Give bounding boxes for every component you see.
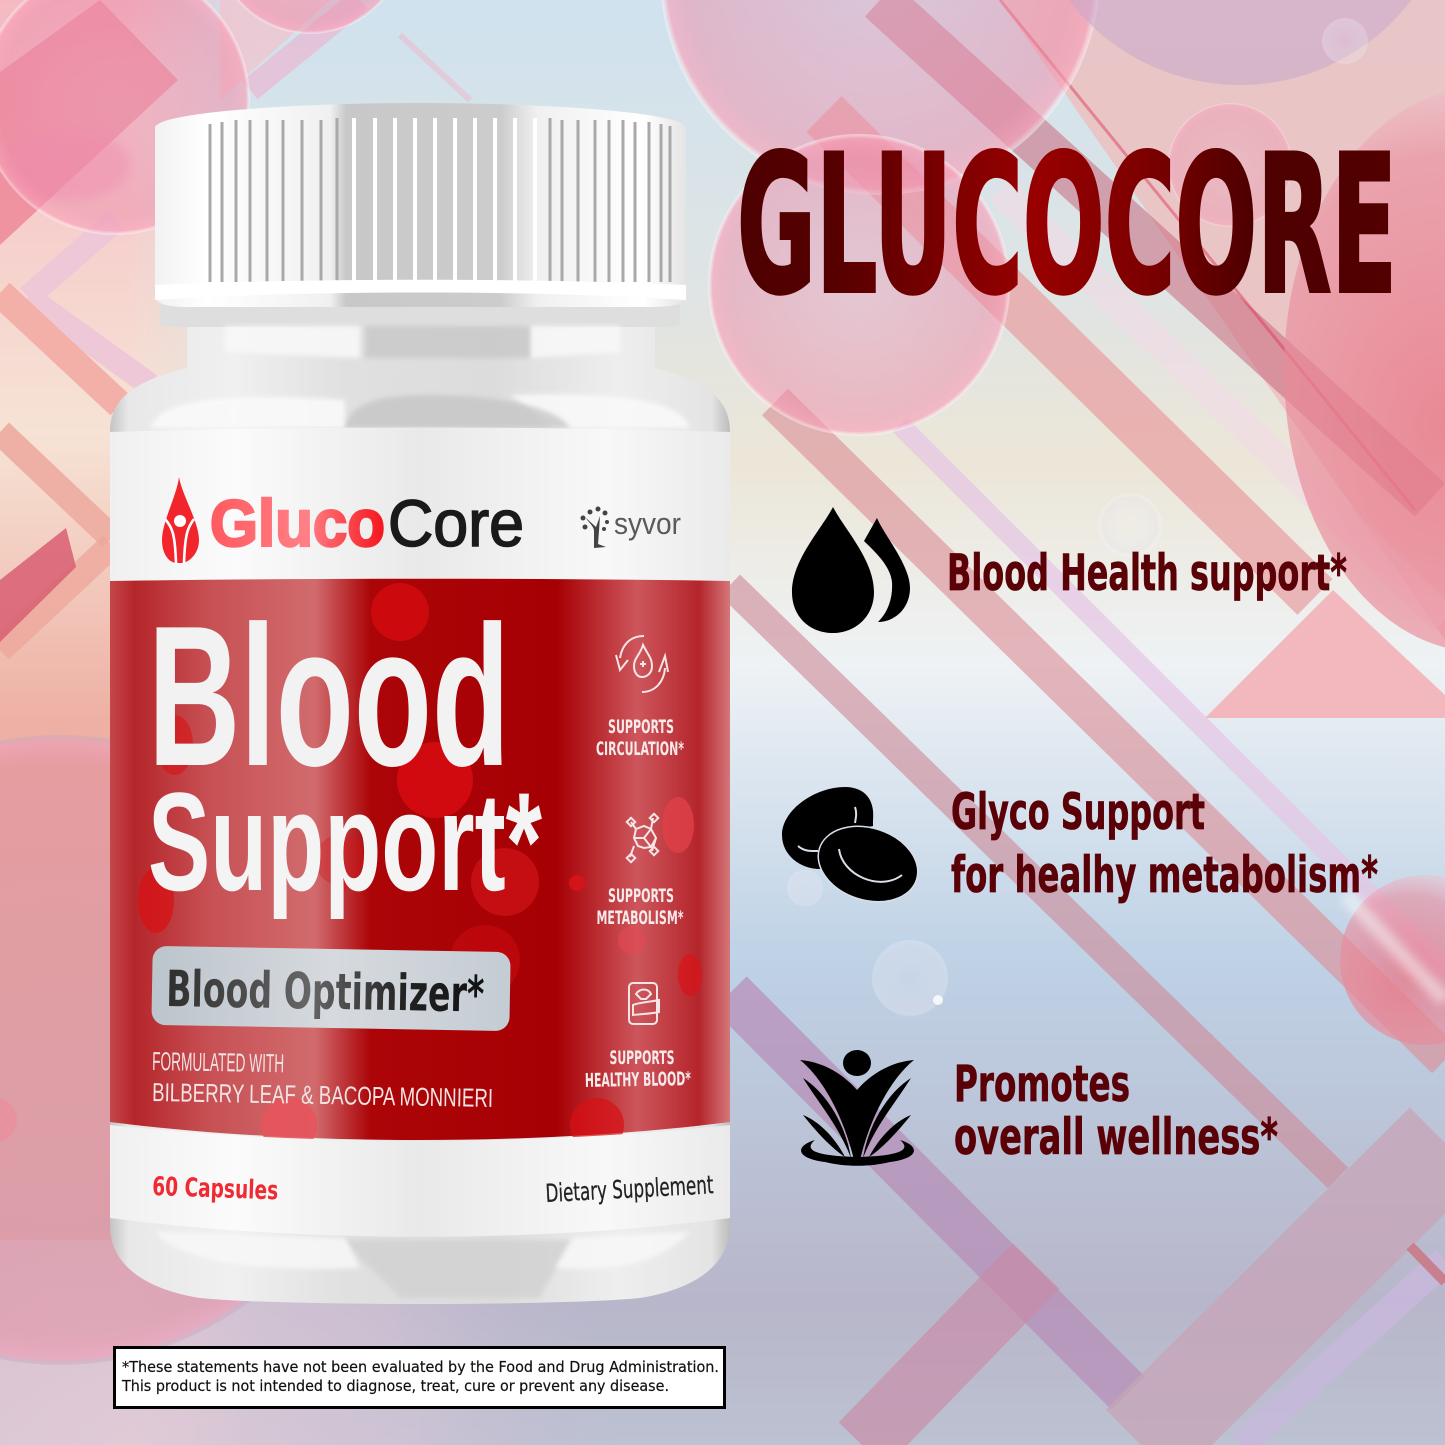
brand logo: GlucoCore: Core (388, 486, 524, 560)
headline: Support: Support* (148, 763, 542, 920)
benefit: metabolism: METABOLISM* (596, 907, 684, 929)
benefit: circulation (596, 636, 684, 760)
icon: wellness figure (800, 1050, 914, 1166)
badge: Blood Optimizer (151, 946, 511, 1031)
bottle body shape (110, 322, 730, 1304)
top white label (110, 428, 730, 581)
icon: circulation (616, 636, 668, 692)
benefit: healthy blood: HEALTHY BLOOD* (585, 1068, 691, 1092)
benefit row: wellness (800, 1050, 1278, 1166)
brand logo: GlucoCore (162, 477, 524, 563)
benefit: healthy blood: SUPPORTS (610, 1047, 674, 1069)
text: glyco support (951, 783, 1378, 904)
text: promotes overall wellness: overall wellness* (954, 1108, 1278, 1166)
headline: Blood: Blood (148, 585, 510, 808)
syvor brand (580, 506, 681, 548)
bottom white label (110, 1125, 730, 1237)
icon: blood cells (782, 787, 928, 914)
icon: molecule (627, 814, 658, 862)
icon: blood drops (792, 507, 910, 633)
benefit: metabolism: SUPPORTS (608, 885, 674, 907)
formula text: BILBERRY LEAF & BACOPA MONNIERI (152, 1077, 493, 1113)
syvor tree icon (580, 506, 609, 548)
benefit: circulation: SUPPORTS (608, 716, 674, 738)
text: promotes overall wellness: Promotes (954, 1055, 1130, 1113)
syvor brand: syvor (614, 506, 681, 541)
disclaimer box: *These statements have not been evaluated by the Food and Drug Administration. (122, 1358, 719, 1376)
capsule count: 60 Capsules (152, 1172, 279, 1206)
disclaimer box: This product is not intended to diagnose, treat, cure or prevent any disease. (121, 1377, 669, 1395)
benefit row: blood health (792, 507, 1347, 633)
disclaimer box (114, 1348, 724, 1408)
logo drop icon (162, 477, 199, 563)
red label (110, 579, 730, 1153)
benefit row: glyco support (782, 783, 1378, 914)
cap (155, 103, 686, 307)
text: promotes overall wellness (954, 1055, 1278, 1166)
benefit: metabolism (596, 814, 684, 929)
product bottle (110, 103, 730, 1304)
text: glyco support: Glyco Support (951, 783, 1205, 841)
brand logo: GlucoCore: Gluco (210, 486, 385, 560)
formula text: FORMULATED WITH (152, 1046, 284, 1078)
benefit: circulation: CIRCULATION* (596, 738, 684, 760)
benefit: healthy blood (585, 983, 691, 1092)
icon: scale with tape (629, 983, 659, 1024)
formula text (152, 1046, 493, 1113)
dietary supplement: Dietary Supplement (545, 1170, 714, 1208)
badge: Blood Optimizer: Blood Optimizer* (166, 960, 485, 1024)
